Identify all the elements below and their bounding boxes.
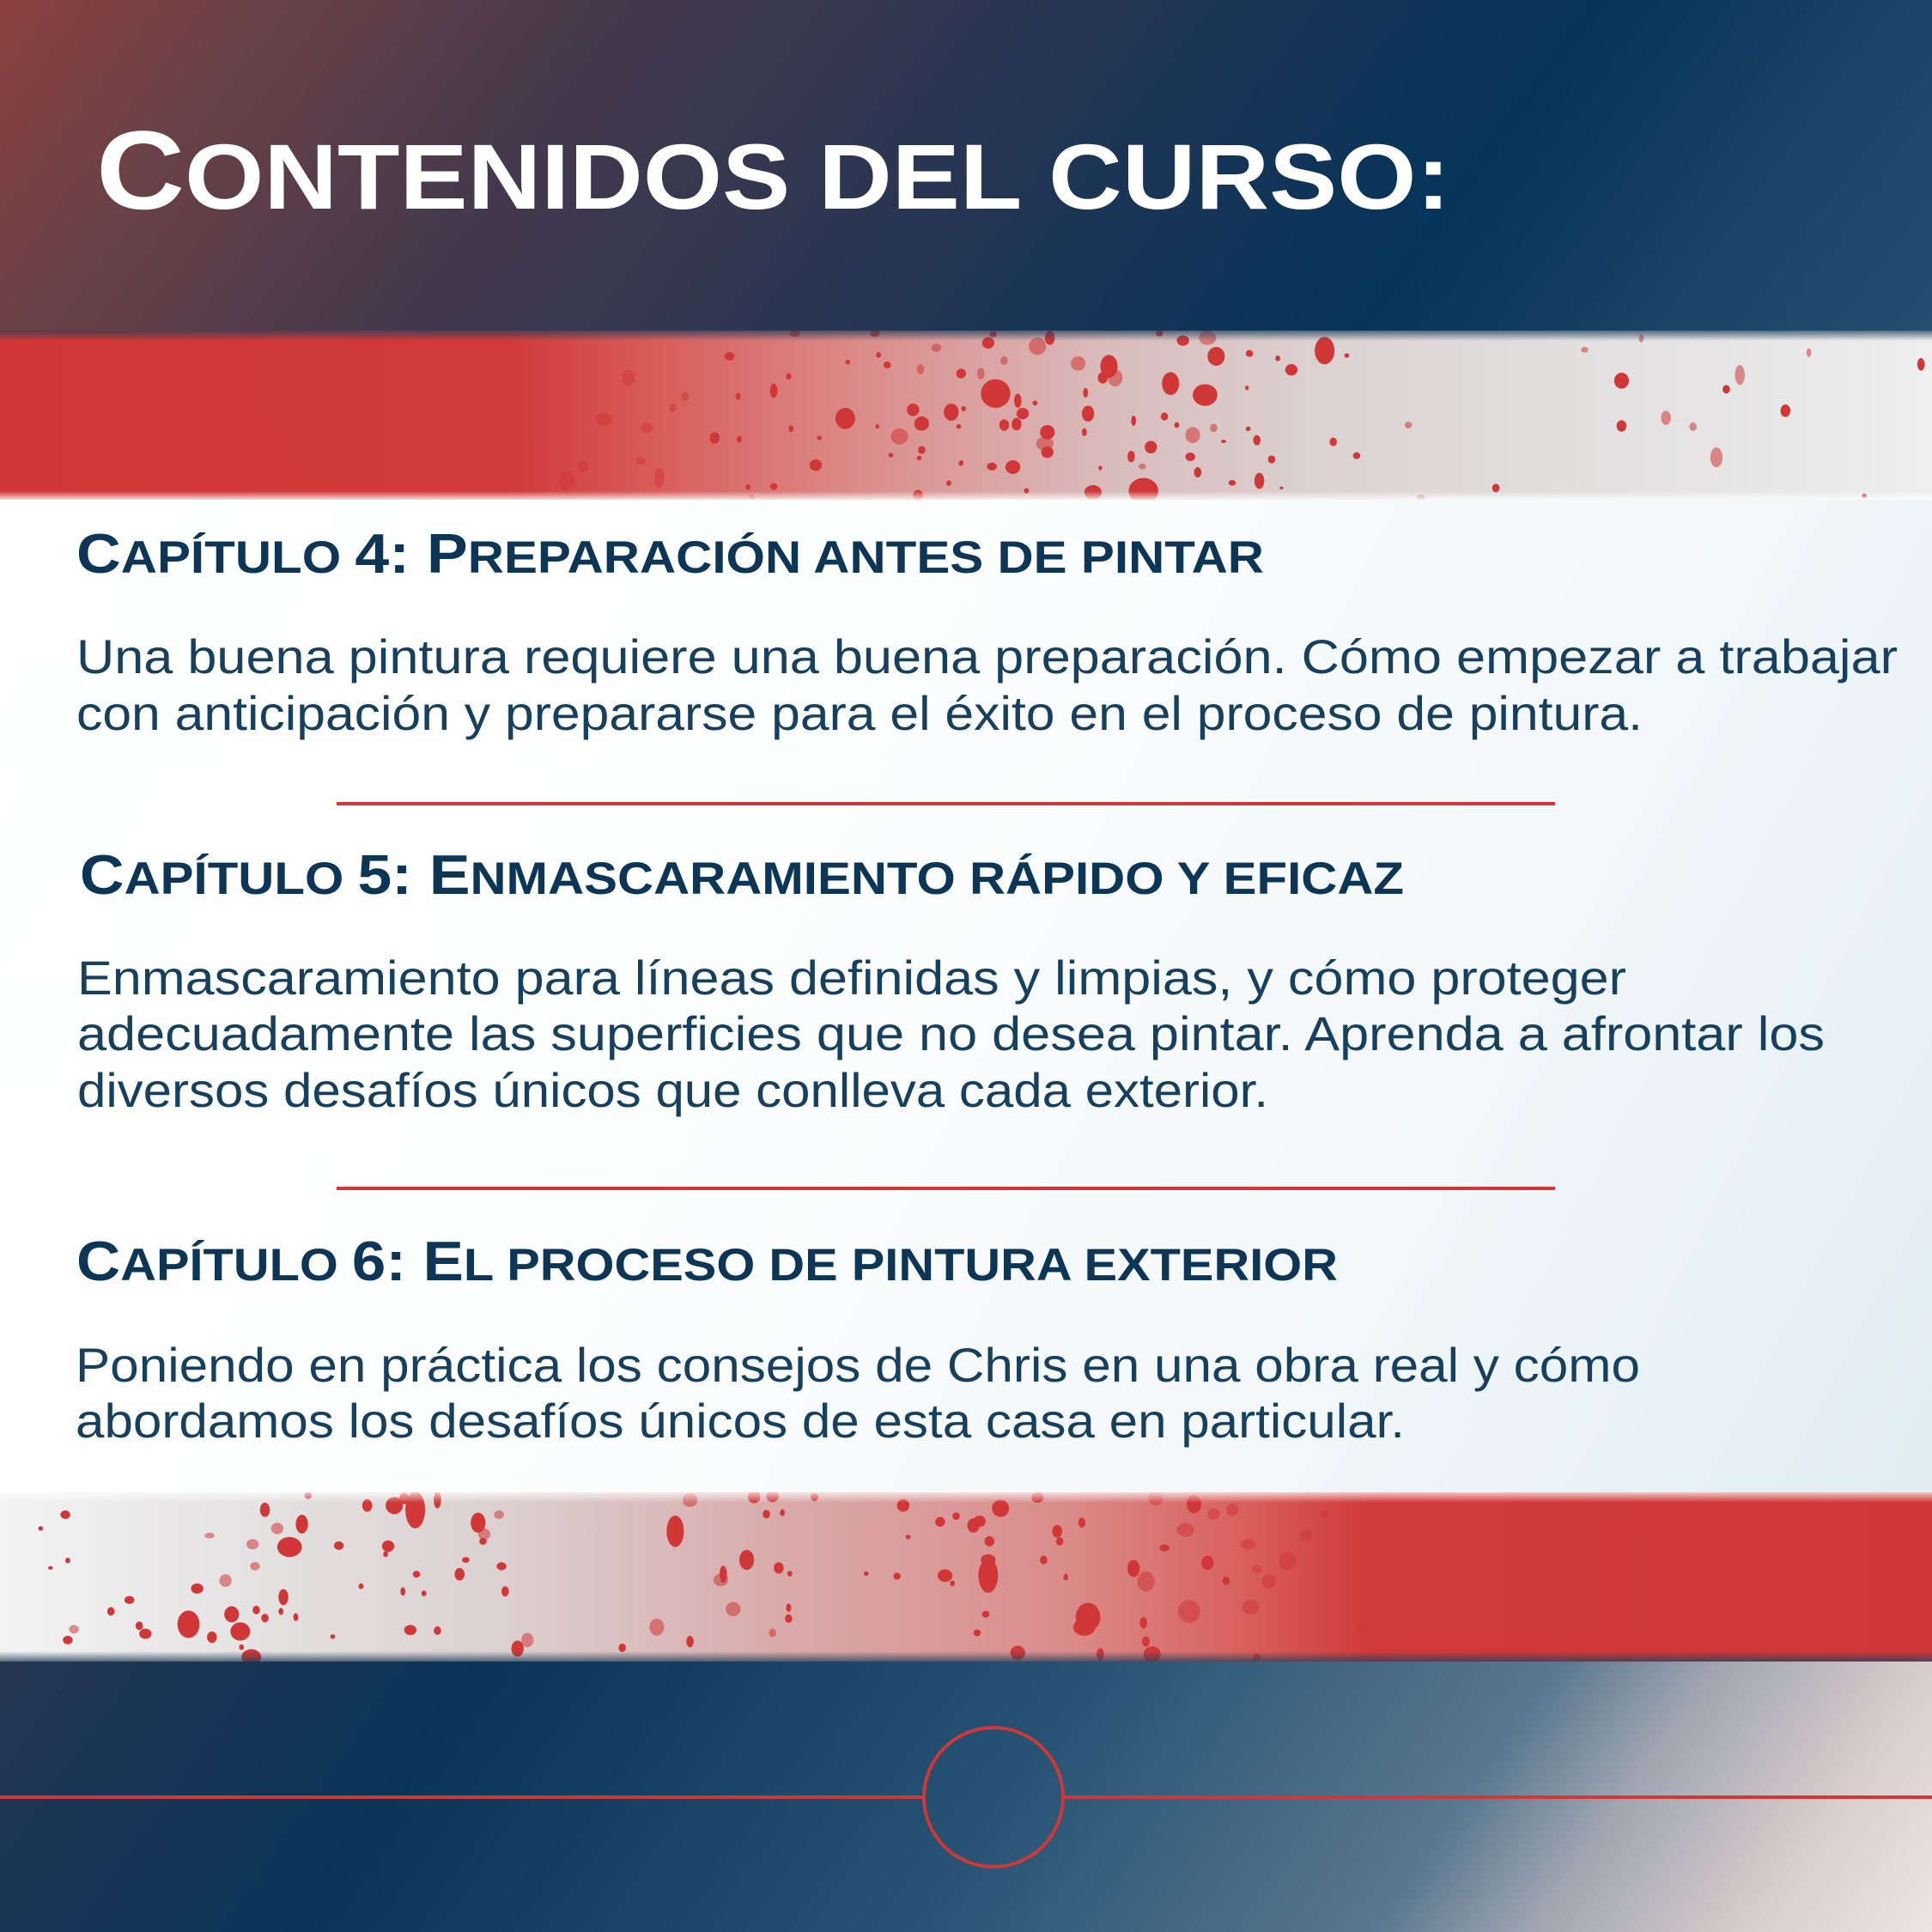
chapter 4 description: con anticipación y prepararse para el éxito en el proceso de pintura. [76,686,1643,740]
footer line and circle emblem [0,1728,1932,1867]
chapter 6 description: Poniendo en práctica los consejos de Chris en una obra real y cómo [76,1338,1640,1392]
top paint splatter band [0,330,1932,504]
content panel [0,500,1932,1492]
footer panel [0,1662,1932,1932]
chapter 6 [76,1230,1640,1448]
chapter 5 heading: CAPÍTULO 5: ENMASCARAMIENTO RÁPIDO Y EFICAZ [80,843,1404,906]
chapter 5 [77,843,1825,1117]
chapter 5 description [77,951,1825,1117]
title: CONTENIDOS DEL CURSO: [96,107,1450,233]
chapter 5 description: diversos desafíos únicos que conlleva cada exterior. [77,1063,1268,1117]
chapter 6 description [76,1338,1640,1448]
chapter 5 description: Enmascaramiento para líneas definidas y limpias, y cómo proteger [77,951,1626,1005]
chapter 4 description: Una buena pintura requiere una buena preparación. Cómo empezar a trabajar [76,629,1898,683]
chapter 5 description: adecuadamente las superficies que no desea pintar. Aprenda a afrontar los [77,1006,1825,1060]
chapter 6 heading: CAPÍTULO 6: EL PROCESO DE PINTURA EXTERIOR [76,1230,1338,1292]
chapter 4 description [76,629,1898,740]
bottom paint splatter band [0,1491,1932,1665]
chapter 4 heading: CAPÍTULO 4: PREPARACIÓN ANTES DE PINTAR [76,522,1264,585]
chapter 6 description: abordamos los desafíos únicos de esta casa en particular. [76,1394,1405,1448]
header panel [0,0,1932,331]
chapter 4 [76,522,1898,740]
